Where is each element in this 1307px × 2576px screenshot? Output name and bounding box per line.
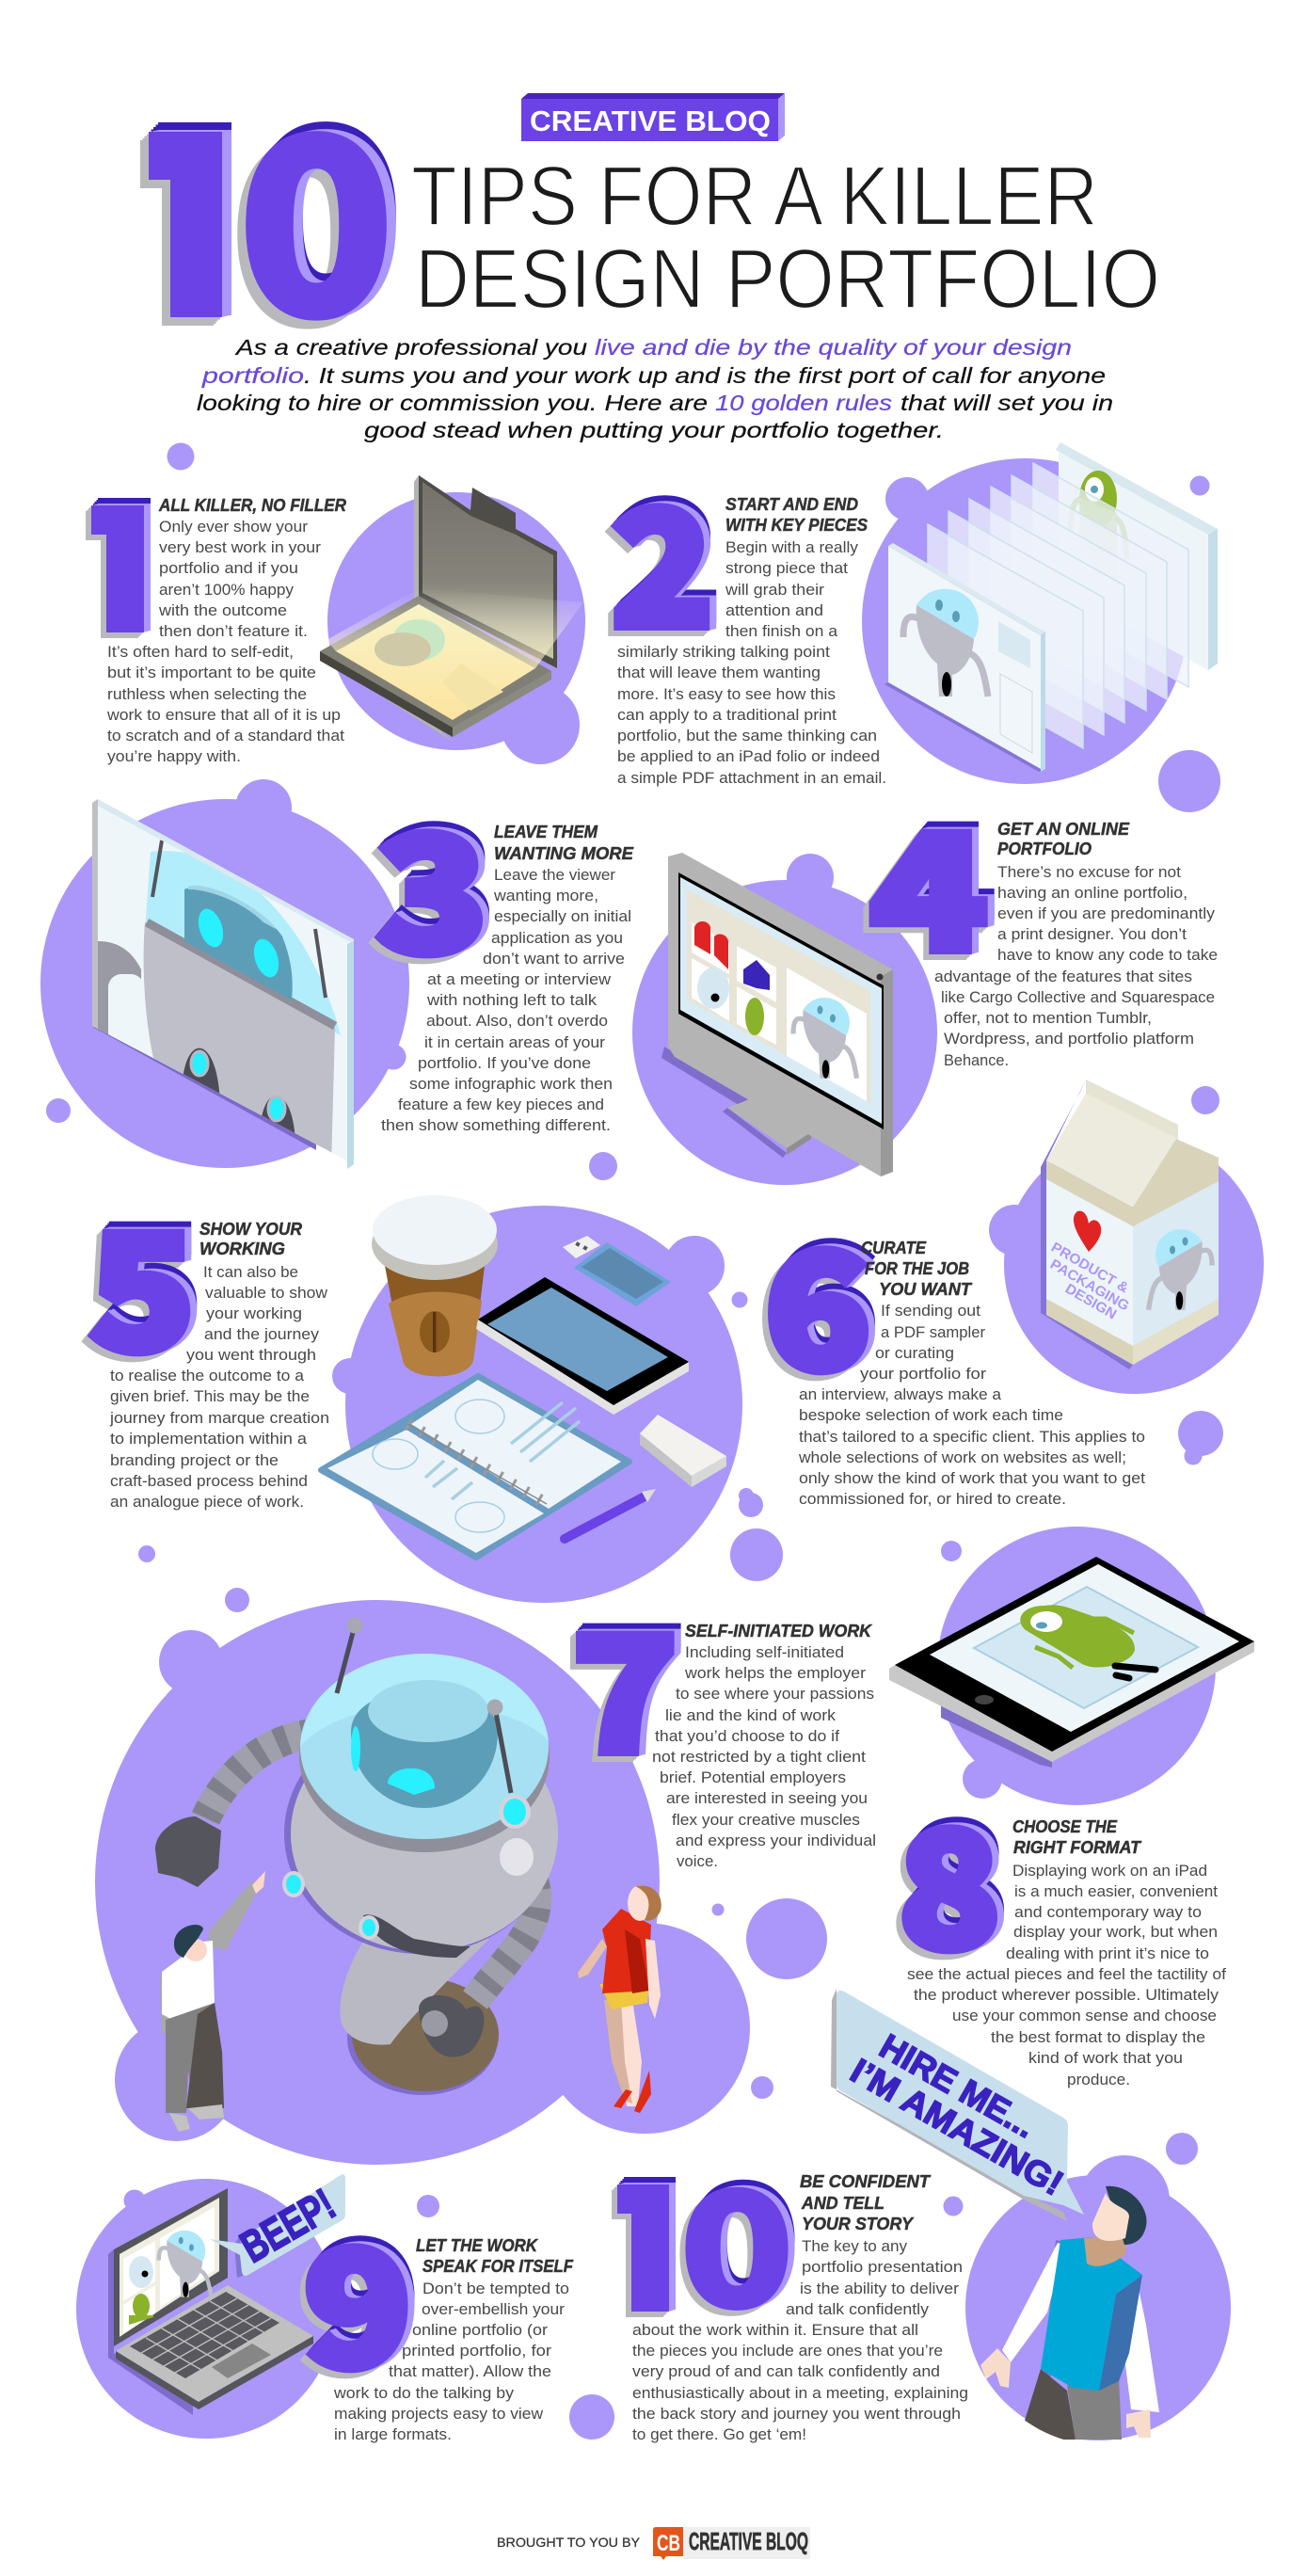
body text: brief. Potential employers [660, 1769, 846, 1786]
number 5: 5 [89, 1164, 195, 1396]
body text [632, 2238, 968, 2443]
body text: an analogue piece of work. [110, 1494, 304, 1511]
panel: tip 1 [70, 442, 585, 765]
body text: similarly striking talking point [617, 644, 830, 661]
heading: FOR THE JOB [865, 1258, 969, 1278]
body text: whole selections of work on websites as well; [798, 1449, 1126, 1466]
body text: see the actual pieces and feel the tactility of [907, 1966, 1226, 1983]
body text: that will leave them wanting [617, 664, 821, 681]
heading [1012, 1816, 1142, 1857]
panel: tip 4 [632, 764, 1218, 1185]
body text: then show something different. [381, 1117, 611, 1134]
body text: valuable to show [205, 1285, 327, 1302]
body text: you went through [186, 1347, 316, 1364]
body text: more. It’s easy to see how this [617, 686, 836, 703]
panel: tip 6 [730, 1080, 1264, 1581]
body text: a simple PDF attachment in an email. [617, 770, 886, 787]
panel: tip 8 [889, 1527, 1254, 2088]
heading [199, 1219, 303, 1258]
body text: then don’t feature it. [159, 623, 308, 640]
decorative blobs [730, 1086, 1264, 1581]
body text [109, 1264, 329, 1511]
intro paragraph: 10 golden rules [715, 391, 892, 415]
number 3: 3 [376, 766, 487, 998]
heading [997, 819, 1130, 858]
body text: branding project or the [110, 1452, 279, 1469]
body text: with nothing left to talk [426, 992, 598, 1009]
heading: SPEAK FOR ITSELF [422, 2256, 574, 2276]
decorative blobs [167, 442, 585, 764]
number 1: 1 [70, 443, 167, 675]
body text: your portfolio for [860, 1366, 987, 1383]
panel: tip 5 [89, 1164, 754, 1603]
brought to you by: BROUGHT TO YOU BY [497, 2535, 641, 2550]
body text: about. Also, don’t overdo [426, 1013, 608, 1030]
body text: Only ever show your [159, 519, 309, 536]
speech bubble: hire me [831, 1989, 1084, 2221]
figure: woman in red dress [578, 1885, 661, 2113]
icon: sketch notebook [321, 1376, 630, 1558]
speech bubble: hire me: HIRE ME... [873, 2026, 1042, 2145]
heading [800, 2171, 932, 2233]
body text: about the work within it. Ensure that all [632, 2322, 918, 2339]
body text [798, 1303, 1145, 1508]
body text: bespoke selection of work each time [799, 1407, 1063, 1424]
body text: Don’t be tempted to [422, 2280, 569, 2297]
number 4: 4 [870, 764, 987, 996]
body text: are interested in seeing you [666, 1790, 868, 1807]
icon: USB stick [563, 1236, 671, 1306]
body text: feature a few key pieces and [398, 1096, 604, 1113]
figure: man pointing [160, 1871, 265, 2132]
body text: enthusiastically about in a meeting, explaining [632, 2385, 968, 2402]
body text: to realise the outcome to a [110, 1368, 305, 1384]
body text: strong piece that [725, 560, 848, 577]
heading: WITH KEY PIECES [725, 515, 869, 535]
intro paragraph: looking to hire or commission you. Here are [197, 391, 708, 415]
body text: to get there. Go get ‘em! [632, 2426, 806, 2443]
number 10: 0 [679, 2121, 794, 2353]
body text: and contemporary way to [1014, 1904, 1202, 1921]
body text: voice. [677, 1853, 718, 1870]
speech bubble: BEEP!: BEEP! [231, 2179, 343, 2272]
body text: will grab their [725, 582, 825, 599]
body text: is a much easier, convenient [1014, 1883, 1218, 1900]
body text: not restricted by a tight client [652, 1749, 866, 1766]
body text: very best work in your [159, 539, 322, 556]
logo: Creative Bloq: CREATIVE BLOQ [689, 2527, 808, 2555]
number 8: 8 [899, 1762, 1000, 1993]
body text: dealing with print it’s nice to [1006, 1945, 1209, 1962]
body text: then finish on a [725, 623, 838, 640]
heading: SHOW YOUR [199, 1219, 303, 1239]
body text: you’re happy with. [107, 748, 241, 765]
icon: milk carton [1041, 1080, 1219, 1369]
body text [617, 539, 886, 787]
body text: a PDF sampler [881, 1324, 986, 1341]
title [411, 150, 1160, 327]
big number 10 [140, 121, 396, 329]
icon: pencil [565, 1489, 656, 1539]
intro paragraph: As a creative professional you [234, 335, 587, 360]
icon: large robot [155, 1617, 558, 2095]
heading: LEAVE THEM [494, 822, 598, 841]
body text: and the journey [204, 1326, 320, 1343]
body text: given brief. This may be the [110, 1388, 310, 1405]
icon: eraser [640, 1415, 726, 1487]
number 6: 6 [765, 1183, 870, 1415]
decorative blobs [76, 2179, 614, 2440]
heading [861, 1238, 973, 1299]
panel: tip 3 [40, 766, 634, 1180]
body text: especially on initial [494, 908, 631, 925]
intro paragraph: . It sums you and your work up and is the first port of call for anyone [304, 363, 1106, 388]
figure: man with speech [980, 2186, 1159, 2440]
heading: START AND END [725, 494, 858, 514]
body text: printed portfolio, for [402, 2343, 552, 2360]
body text: an interview, always make a [799, 1386, 1002, 1403]
body text: portfolio and if you [159, 560, 298, 577]
body text [934, 864, 1218, 1069]
body text: don’t want to arrive [483, 951, 625, 968]
body text: commissioned for, or hired to create. [799, 1491, 1066, 1508]
heading [416, 2235, 574, 2276]
label: product and packaging design [1047, 1240, 1132, 1322]
body text: the product wherever possible. Ultimately [914, 1987, 1219, 2004]
intro paragraph: live and die by the quality of your design [595, 335, 1072, 360]
body text: to implementation within a [110, 1431, 308, 1448]
icon: smartphone [476, 1277, 689, 1415]
body text: craft-based process behind [110, 1473, 308, 1490]
speech bubble: hire me: I’M AMAZING! [844, 2051, 1070, 2203]
body text: that you’d choose to do if [655, 1728, 839, 1745]
body text: or curating [875, 1345, 954, 1362]
icon: stacked sheets [885, 442, 1218, 772]
panel: tip 9 [76, 2174, 614, 2443]
heading: YOUR STORY [802, 2214, 915, 2233]
decorative blobs [937, 1527, 1216, 1805]
logo: Creative Bloq: CB [657, 2531, 680, 2556]
badge: Creative Bloq: CREATIVE BLOQ [530, 104, 771, 137]
body text: a print designer. You don’t [997, 926, 1187, 943]
body text: and talk confidently [786, 2301, 930, 2318]
body text: attention and [725, 602, 823, 619]
body text: If sending out [881, 1303, 980, 1320]
speech bubble: BEEP! [210, 2174, 345, 2278]
decorative blobs [862, 458, 1220, 812]
body text: the pieces you include are ones that you’re [632, 2343, 943, 2360]
panel: tip 10 [595, 1989, 1231, 2443]
body text: over-embellish your [422, 2301, 566, 2318]
body text: use your common sense and choose [952, 2008, 1217, 2024]
body text: offer, not to mention Tumblr, [944, 1010, 1152, 1027]
body text: to scratch and of a standard that [107, 728, 344, 744]
body text: It’s often hard to self-edit, [107, 644, 294, 661]
big number 10: 0 [237, 30, 395, 387]
heading: CHOOSE THE [1012, 1816, 1118, 1836]
decorative blobs [138, 1206, 754, 1603]
heading: ALL KILLER, NO FILLER [158, 495, 347, 515]
body text: Displaying work on an iPad [1012, 1863, 1207, 1880]
body text: it in certain areas of your [424, 1034, 606, 1051]
body text: ruthless when selecting the [107, 686, 307, 703]
decorative blobs [943, 2133, 1231, 2440]
icon: laptop [108, 2188, 313, 2415]
body text: be applied to an iPad folio or indeed [617, 748, 880, 765]
body text: the best format to display the [991, 2029, 1205, 2046]
decorative blobs [632, 854, 937, 1185]
heading: AND TELL [801, 2193, 885, 2213]
body text: kind of work that you [1028, 2050, 1183, 2067]
body text: Behance. [944, 1052, 1009, 1069]
heading: CURATE [861, 1238, 927, 1257]
body text: Wordpress, and portfolio platform [944, 1031, 1194, 1048]
panel: tip 2 [612, 440, 1220, 812]
body text: application as you [491, 930, 623, 947]
body text: is the ability to deliver [800, 2280, 960, 2297]
body text [381, 867, 631, 1134]
intro paragraph: good stead when putting your portfolio together. [364, 418, 944, 442]
body text: very proud of and can talk confidently and [632, 2363, 940, 2380]
body text: that’s tailored to a specific client. This applies to [799, 1429, 1145, 1446]
body text: flex your creative muscles [672, 1812, 860, 1829]
decorative blobs [95, 1588, 827, 2165]
big number 10: 1 [108, 28, 259, 385]
body text: having an online portfolio, [997, 885, 1187, 902]
heading: BE CONFIDENT [800, 2171, 932, 2191]
number 2: 2 [612, 440, 713, 672]
body text: portfolio. If you’ve done [418, 1055, 591, 1072]
body text: journey from marque creation [109, 1410, 329, 1427]
body text: work to do the talking by [333, 2385, 515, 2402]
heading: YOU WANT [879, 1279, 973, 1299]
body text: making projects easy to view [334, 2406, 543, 2423]
heading: WORKING [199, 1239, 285, 1258]
heading: PORTFOLIO [997, 839, 1092, 858]
label: product and packaging design: DESIGN [1062, 1281, 1119, 1322]
body text: at a meeting or interview [427, 971, 611, 988]
body text: work to ensure that all of it is up [106, 707, 341, 724]
number 10: 1 [595, 2121, 693, 2353]
body text [106, 519, 344, 765]
icon: coffee cup [372, 1195, 498, 1376]
body text [333, 2280, 569, 2443]
body text: to see where your passions [676, 1686, 874, 1703]
body text [907, 1863, 1226, 2088]
body text: display your work, but when [1013, 1924, 1218, 1941]
body text: produce. [1067, 2072, 1130, 2088]
body text: Leave the viewer [494, 867, 616, 884]
body text: It can also be [203, 1264, 298, 1281]
intro paragraph [197, 335, 1113, 442]
footer credit [497, 2527, 810, 2560]
icon: portfolio case [320, 475, 583, 742]
body text [652, 1644, 876, 1870]
number 10 [595, 2121, 794, 2353]
body text: wanting more, [493, 888, 598, 904]
body text: and express your individual [676, 1832, 876, 1849]
intro paragraph: that will set you in [901, 391, 1113, 415]
body text: advantage of the features that sites [934, 968, 1192, 985]
title: DESIGN PORTFOLIO [415, 232, 1160, 327]
body text: but it’s important to be quite [107, 664, 316, 681]
logo: Creative Bloq [653, 2527, 810, 2560]
heading [725, 494, 869, 535]
body text: even if you are predominantly [997, 905, 1216, 922]
icon: tablet [889, 1557, 1254, 1768]
heading [494, 822, 634, 863]
heading: LET THE WORK [416, 2235, 538, 2255]
heading: GET AN ONLINE [997, 819, 1130, 839]
number 7: 7 [572, 1566, 677, 1798]
body text: only show the kind of work that you want to get [799, 1470, 1145, 1487]
body text: like Cargo Collective and Squarespace [941, 989, 1215, 1006]
decorative blobs [40, 779, 617, 1180]
title: TIPS FOR A KILLER [411, 150, 1098, 244]
body text: online portfolio (or [412, 2322, 549, 2339]
label: product and packaging design: PACKAGING [1047, 1256, 1132, 1314]
icon: framed robot close-up [92, 799, 354, 1169]
body text: can apply to a traditional print [617, 707, 837, 724]
body text: Including self-initiated [685, 1644, 844, 1661]
badge: Creative Bloq [521, 93, 785, 141]
heading: RIGHT FORMAT [1013, 1837, 1142, 1857]
body text: aren’t 100% happy [159, 582, 295, 599]
body text: in large formats. [334, 2426, 452, 2443]
body text: the back story and journey you went through [632, 2406, 961, 2423]
body text: Begin with a really [725, 539, 859, 556]
body text: with the outcome [158, 602, 287, 619]
intro paragraph: portfolio [201, 363, 304, 388]
body text: portfolio, but the same thinking can [617, 728, 877, 744]
header [108, 28, 1160, 442]
body text: have to know any code to take [997, 947, 1218, 964]
body text: that matter). Allow the [389, 2363, 551, 2380]
body text: The key to any [802, 2238, 908, 2255]
body text: portfolio presentation [802, 2259, 963, 2276]
panel: tip 7 [95, 1566, 876, 2165]
heading: WANTING MORE [494, 843, 634, 863]
heading: SELF-INITIATED WORK [685, 1621, 872, 1640]
body text: lie and the kind of work [665, 1707, 837, 1724]
icon: desktop monitor [661, 853, 893, 1176]
body text: some infographic work then [409, 1076, 613, 1093]
body text: work helps the employer [684, 1665, 867, 1682]
body text: your working [206, 1305, 302, 1322]
number 9: 9 [304, 2181, 411, 2412]
label: product and packaging design: PRODUCT & [1048, 1240, 1131, 1297]
body text: There’s no excuse for not [997, 864, 1181, 881]
